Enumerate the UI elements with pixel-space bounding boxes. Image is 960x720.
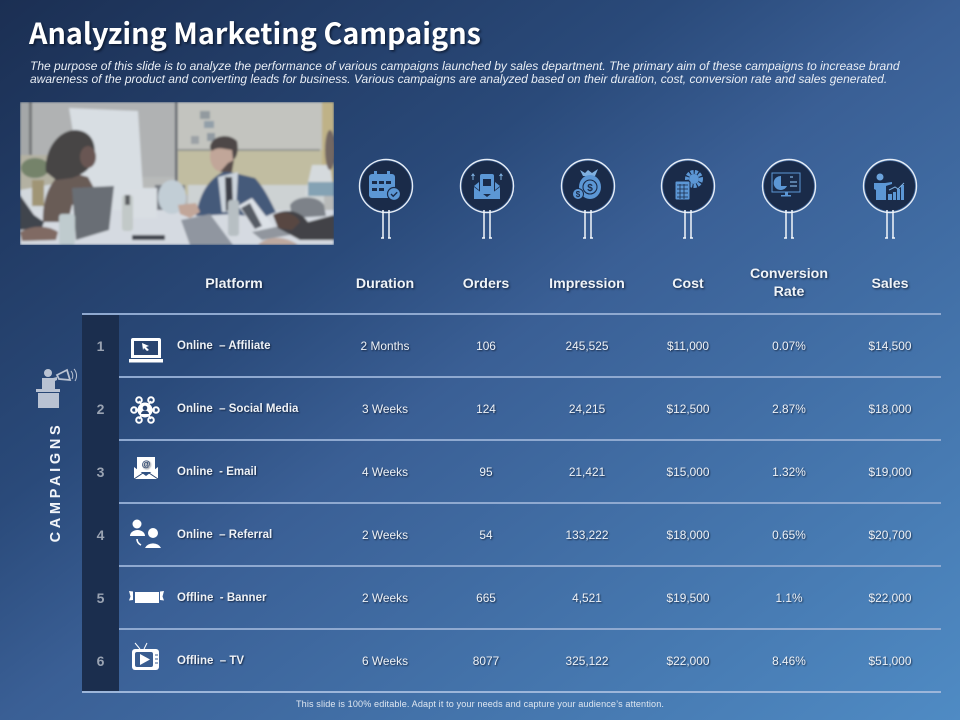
row 3: Online Email (97, 457, 913, 480)
intro text: awareness of the product and converting leads for business. Various campaigns are analyzed based on their duration, cost, conversion rate and sales generated. (30, 72, 887, 86)
row 1: Online Affiliate: $14,500 (868, 339, 911, 353)
row 6: Offline TV: $22,000 (666, 654, 709, 668)
row 2: Online Social Media: $12,500 (666, 402, 709, 416)
table header row: Conversion (750, 266, 828, 282)
row 3: Online Email: 95 (479, 465, 493, 479)
row 4: Online Referral: $18,000 (666, 528, 709, 542)
icon: presenter with bars (Sales) (862, 158, 918, 239)
row 6: Offline TV: 6 (97, 653, 104, 669)
row 3: Online Email: 21,421 (569, 465, 605, 479)
icon: email envelope (134, 457, 158, 480)
row 3: Online Email: Online - Email (177, 466, 257, 478)
row 4: Online Referral (96, 520, 913, 548)
row 4: Online Referral: 54 (479, 528, 493, 542)
row 2: Online Social Media: 124 (476, 402, 496, 416)
icon: money bags (Impression): $ (587, 183, 593, 194)
row 5: Offline Banner: 665 (476, 591, 496, 605)
icon: email envelope: @ (142, 459, 151, 469)
icon: speaker at podium with megaphone (36, 368, 77, 408)
row 3: Online Email: $19,000 (868, 465, 911, 479)
row 5: Offline Banner (97, 590, 913, 606)
icon: monitor with chart (Conversion Rate) (762, 158, 816, 239)
row 4: Online Referral: Online – Referral (177, 529, 272, 541)
row 2: Online Social Media (97, 396, 913, 424)
icon: envelope (Orders) (460, 158, 514, 239)
table header row: Sales (871, 276, 909, 292)
row 5: Offline Banner: Offline - Banner (177, 592, 266, 604)
row 5: Offline Banner: $19,500 (666, 591, 709, 605)
row 1: Online Affiliate: 0.07% (772, 339, 806, 353)
icon: money bags (Impression) (560, 158, 616, 239)
icon: calculator and gear (Cost) (660, 158, 716, 239)
row 4: Online Referral: 4 (97, 527, 104, 543)
table header row: Duration (356, 276, 414, 292)
table header row: Cost (672, 276, 704, 292)
row 3: Online Email: 1.32% (772, 465, 806, 479)
icon: laptop (129, 338, 163, 362)
icon: referral people (130, 520, 161, 548)
icon: calendar (Duration) (358, 158, 414, 239)
row 6: Offline TV: 8.46% (772, 654, 806, 668)
title: Analyzing Marketing Campaigns (29, 12, 481, 53)
photo: business meeting (20, 102, 334, 245)
intro text: The purpose of this slide is to analyze the performance of various campaigns launched by sales department. The primary aim of these campaigns to increase brand (30, 59, 900, 73)
row 6: Offline TV (97, 642, 913, 670)
row 1: Online Affiliate: 245,525 (566, 339, 608, 353)
footer note: This slide is 100% editable. Adapt it to your needs and capture your audience’s attention. (296, 699, 664, 709)
table header row: Rate (774, 284, 804, 300)
icon: social network (130, 396, 160, 424)
row 5: Offline Banner: 5 (97, 590, 104, 606)
icon: money bags (Impression): $ (576, 190, 581, 199)
row 1: Online Affiliate: $11,000 (667, 339, 709, 353)
number column band (82, 314, 119, 692)
row 1: Online Affiliate: 1 (97, 338, 104, 354)
icon: television (132, 642, 159, 670)
row 2: Online Social Media: 3 Weeks (362, 402, 408, 416)
row 3: Online Email: 4 Weeks (362, 465, 408, 479)
row 5: Offline Banner: 4,521 (572, 591, 602, 605)
row 6: Offline TV: $51,000 (868, 654, 911, 668)
table header row: Orders (463, 276, 509, 292)
row 6: Offline TV: 8077 (473, 654, 499, 668)
row 6: Offline TV: Offline – TV (177, 655, 244, 667)
row 6: Offline TV: 325,122 (566, 654, 608, 668)
row 2: Online Social Media: $18,000 (868, 402, 911, 416)
row 5: Offline Banner: 1.1% (775, 591, 803, 605)
row 6: Offline TV: 6 Weeks (362, 654, 408, 668)
row 5: Offline Banner: 2 Weeks (362, 591, 408, 605)
row 4: Online Referral: 133,222 (566, 528, 608, 542)
row 2: Online Social Media: 2 (97, 401, 104, 417)
row 1: Online Affiliate: 2 Months (361, 339, 409, 353)
row 1: Online Affiliate (97, 338, 913, 362)
row 1: Online Affiliate: Online – Affiliate (177, 340, 271, 352)
intro text (30, 59, 900, 86)
row 2: Online Social Media: Online – Social Media (177, 403, 298, 415)
icon: banner (129, 591, 164, 603)
row 1: Online Affiliate: 106 (476, 339, 496, 353)
row 5: Offline Banner: $22,000 (868, 591, 911, 605)
campaigns vertical label: CAMPAIGNS (48, 422, 64, 542)
row 4: Online Referral: 0.65% (772, 528, 806, 542)
row 3: Online Email: 3 (97, 464, 104, 480)
row 2: Online Social Media: 2.87% (772, 402, 806, 416)
row 4: Online Referral: $20,700 (868, 528, 911, 542)
row 4: Online Referral: 2 Weeks (362, 528, 408, 542)
table header row: Platform (205, 276, 263, 292)
row 3: Online Email: $15,000 (666, 465, 709, 479)
table header row: Impression (549, 276, 625, 292)
row 2: Online Social Media: 24,215 (569, 402, 605, 416)
table header row (205, 266, 910, 300)
